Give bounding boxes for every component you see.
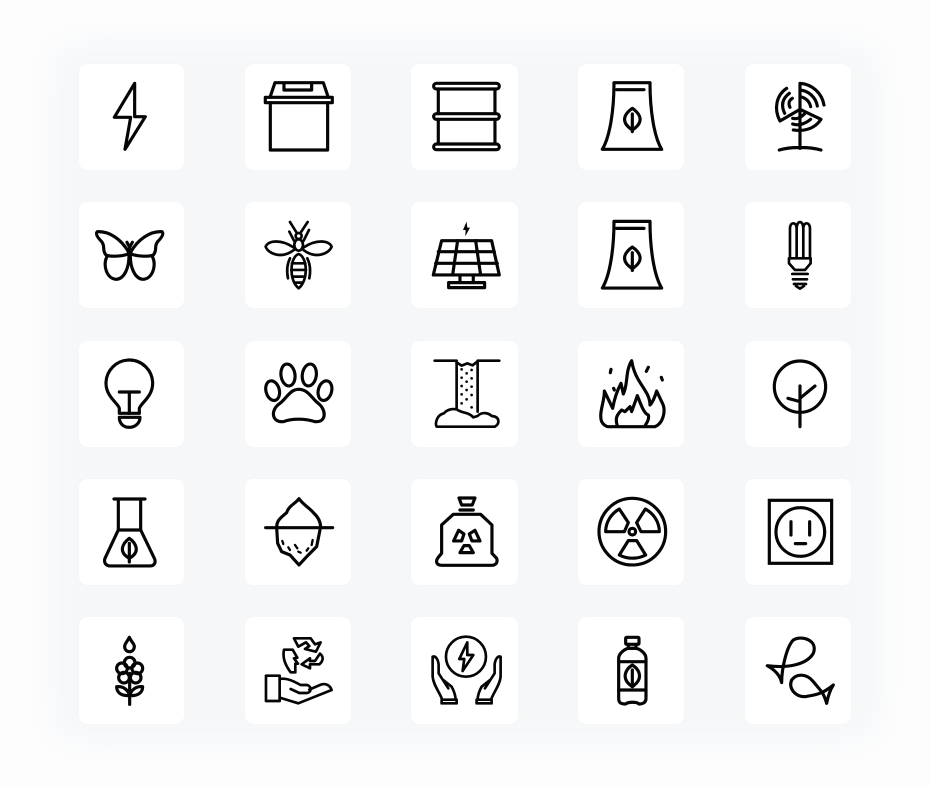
icon: eco bottle [619, 637, 646, 704]
icon: power outlet [769, 500, 832, 563]
card: oil barrel [410, 64, 518, 170]
card: bee [244, 202, 352, 308]
card: tree [744, 340, 852, 448]
icon: lightning bolt [114, 83, 145, 149]
card: radioactive waste bag [410, 478, 518, 586]
card: light bulb [78, 340, 184, 448]
icon: tree [774, 361, 826, 427]
icon: fire [601, 361, 664, 427]
icon: wind turbine [777, 83, 824, 150]
card: trash bin [244, 64, 352, 170]
card: eco bottle [578, 616, 684, 724]
icon: oil barrel [434, 83, 499, 150]
card: power outlet [744, 478, 852, 586]
card: butterfly [78, 202, 184, 308]
icon: compact fluorescent bulb [789, 222, 811, 289]
card: flower with water drop [78, 616, 184, 724]
card: recycling in hand [244, 616, 352, 724]
icon: recycling in hand [266, 638, 332, 703]
icon: solar panel [433, 222, 499, 288]
card: animal paw [244, 340, 352, 448]
card: hands holding energy [410, 616, 518, 724]
card: solar panel [410, 202, 518, 308]
icon: flower with water drop [117, 637, 143, 704]
card: fish [744, 616, 852, 724]
icon: fish [767, 638, 833, 703]
card: green cooling tower [578, 64, 684, 170]
card: compact fluorescent bulb [744, 202, 852, 308]
icon: green cooling tower [602, 83, 662, 149]
card: waterfall [410, 340, 518, 448]
card: radiation symbol [578, 478, 684, 586]
icon: bee [266, 222, 332, 288]
card: green cooling tower two [578, 202, 684, 308]
card: eco flask [78, 478, 184, 586]
icon: animal paw [264, 363, 334, 422]
icon: green cooling tower [602, 221, 662, 288]
icon: trash bin [265, 83, 332, 150]
card: iceberg [244, 478, 352, 586]
card: wind turbine [744, 64, 852, 170]
icon: iceberg [266, 499, 333, 565]
card: fire [578, 340, 684, 448]
icon: radioactive waste bag [437, 498, 497, 565]
icon: hands holding energy [433, 637, 501, 703]
icon: light bulb [106, 360, 153, 427]
icon: radiation symbol [599, 498, 666, 565]
icon: waterfall [435, 361, 499, 427]
icon: eco flask [105, 499, 155, 566]
icon: butterfly [97, 232, 163, 279]
card: lightning bolt [78, 64, 184, 170]
